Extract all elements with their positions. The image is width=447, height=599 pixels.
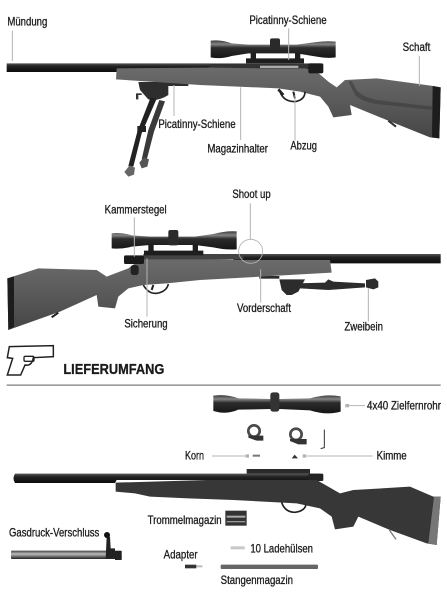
labels	[9, 398, 441, 587]
leaders	[12, 28, 419, 141]
trigger guard	[282, 502, 306, 512]
bipod	[124, 82, 188, 177]
barrel	[233, 254, 441, 263]
rail	[247, 469, 310, 474]
butt pad	[428, 497, 441, 545]
labels: rifle 2: Zweibein	[344, 320, 383, 334]
action and bolt	[143, 254, 243, 259]
sights	[253, 455, 260, 457]
labels: Adapter	[164, 547, 198, 561]
labels: rifle 1	[7, 13, 431, 156]
leader dots	[246, 404, 349, 458]
rifle 2 with scope and folded bipod	[7, 187, 441, 378]
drum magazine	[225, 511, 247, 526]
labels: Stangenmagazin	[221, 573, 293, 587]
contents section	[9, 392, 441, 587]
barrel	[7, 63, 320, 72]
leaders	[212, 406, 373, 456]
labels: 10 Ladehülsen	[250, 541, 313, 555]
adapter	[185, 565, 202, 568]
scope	[112, 231, 237, 249]
labels: rifle 1: Magazinhalter	[207, 142, 268, 156]
rail and mounts	[246, 48, 304, 63]
labels: Gasdruck-Verschluss	[9, 526, 99, 540]
labels: Kimme	[377, 449, 407, 463]
labels: rifle 2: Kammerstegel	[105, 202, 167, 216]
rail and mounts	[144, 243, 203, 255]
trigger guard	[278, 89, 305, 102]
scope	[213, 395, 341, 413]
labels: Korn	[185, 449, 204, 463]
butt pad	[7, 276, 14, 330]
leaders and shoot-up circle	[134, 203, 368, 322]
labels: rifle 1: Schaft	[403, 40, 431, 54]
labels: rifle 1: Mündung	[7, 15, 47, 29]
trigger guard	[143, 284, 168, 293]
labels: rifle 1: Picatinny-Schiene	[158, 117, 236, 131]
scope	[211, 40, 336, 58]
labels: rifle 1: Abzug	[290, 138, 317, 152]
divider	[7, 384, 441, 386]
scope mount rings	[248, 425, 302, 440]
cheek rest shading	[348, 81, 433, 110]
bolt	[308, 474, 323, 481]
sling stud	[52, 313, 58, 317]
labels: rifle 2: Vorderschaft	[237, 301, 292, 315]
heading: LIEFERUMFANG	[63, 361, 164, 378]
sling stud	[389, 530, 396, 539]
labels: Trommelmagazin	[148, 513, 222, 527]
labels: rifle 2: Shoot up	[232, 187, 271, 201]
labels: rifle 2	[105, 187, 383, 334]
action and bolt	[210, 64, 313, 68]
sling stud	[388, 121, 396, 127]
icon: pistol trigger guard	[24, 356, 34, 361]
stock	[116, 480, 441, 545]
ring bases	[248, 436, 307, 444]
loading shells	[231, 546, 245, 549]
hex key	[321, 430, 324, 449]
barrel	[14, 474, 320, 483]
stock	[7, 257, 332, 330]
butt pad	[432, 86, 441, 138]
rod magazine	[221, 565, 318, 569]
rifle 1 with scope and bipod	[7, 28, 441, 177]
icon: pistol outline	[7, 346, 53, 375]
folded bipod	[259, 276, 378, 295]
labels: rifle 2: Sicherung	[124, 316, 168, 330]
stock	[116, 66, 441, 138]
labels: rifle 1: Picatinny-Schiene	[249, 13, 327, 27]
gas-pressure bolt	[11, 532, 122, 560]
rifle 3	[14, 469, 441, 545]
